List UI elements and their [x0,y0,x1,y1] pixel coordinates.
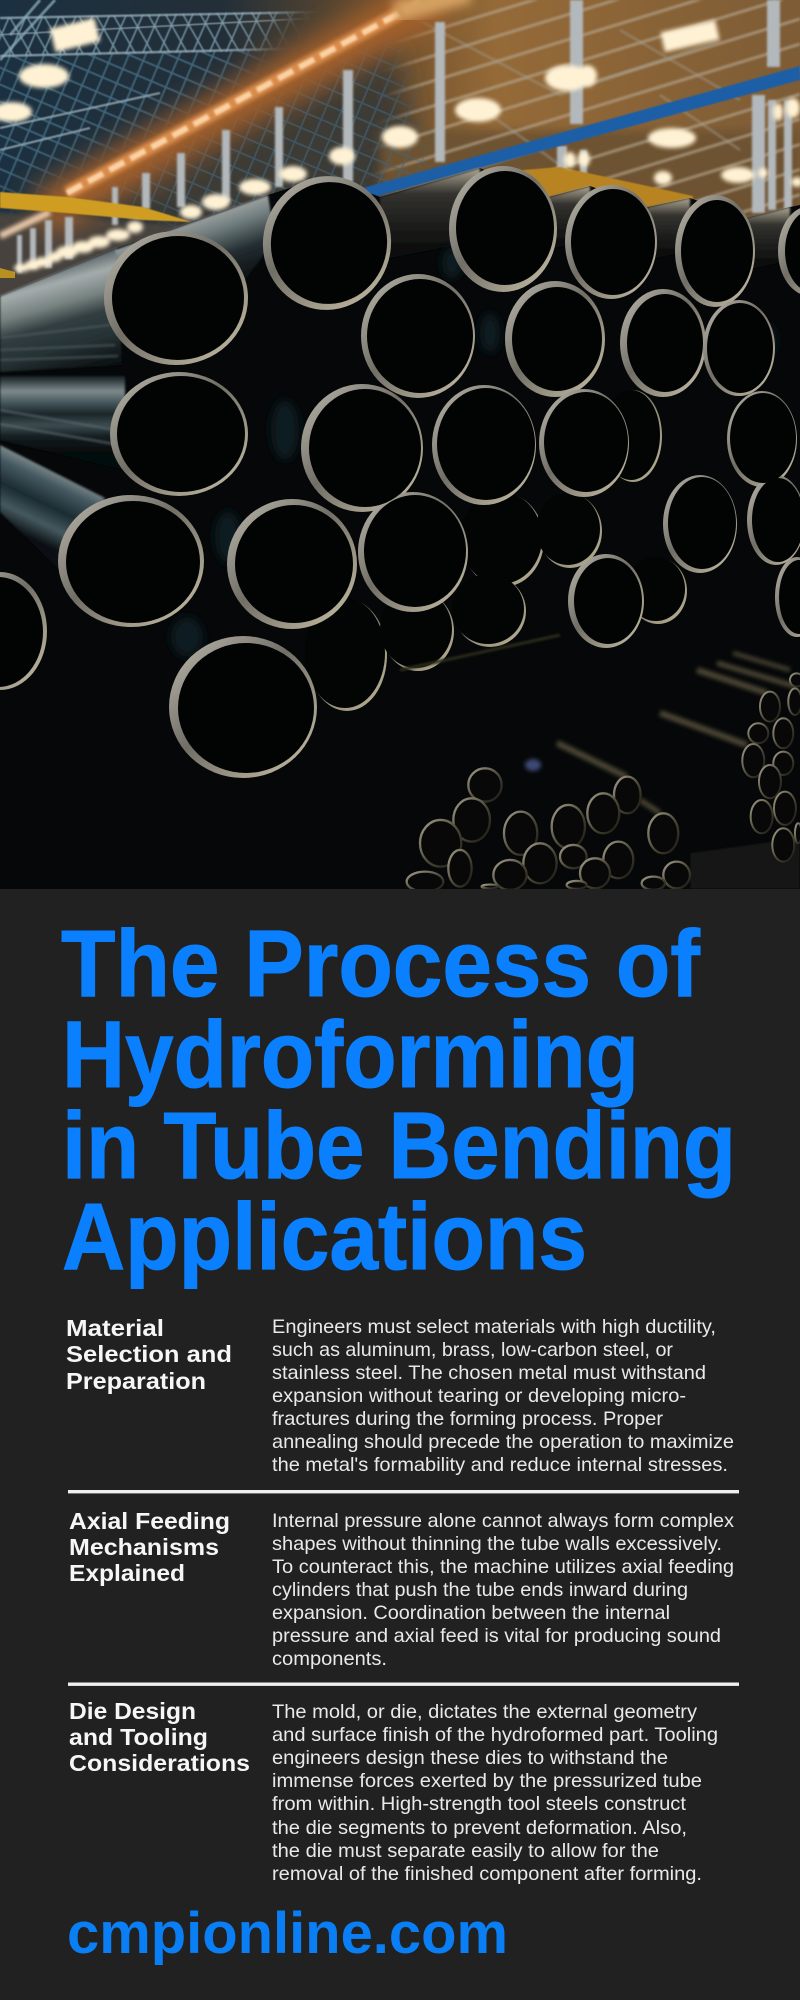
section 3 body text: the die must separate easily to allow for the [272,1840,659,1862]
lower middle ceiling tone [119,46,428,225]
section 2 body text [272,1510,734,1670]
section 2 body text: cylinders that push the tube ends inward during [272,1579,688,1601]
section 2 body text: shapes without thinning the tube walls excessively. [272,1533,722,1555]
section 2 heading: Axial Feeding Mechanisms Explained: Explained [69,1560,185,1586]
section 3 heading: Die Design and Tooling Considerations: and Tooling [69,1724,208,1750]
small tubes cluster, right side [742,673,800,862]
section 3 heading: Die Design and Tooling Considerations: Die Design [69,1698,196,1724]
section 3 body text: engineers design these dies to withstand the [272,1747,668,1769]
section 3 body text: The mold, or die, dictates the external geometry [272,1701,697,1723]
blue roof beam [363,66,800,200]
tube walls receding to the left [0,168,790,570]
section 1 body text: fractures during the forming process. Proper [272,1408,664,1430]
section 3 body text: removal of the finished component after forming. [272,1863,702,1885]
footer website: cmpionline.com [67,1901,508,1966]
title: The Process of [61,911,700,1017]
dark mass of the tube stack [0,168,800,301]
foreground floor and long small tubes [400,635,800,889]
section 1 body text: Engineers must select materials with high ductility, [272,1316,716,1338]
steel columns [17,0,792,273]
section 2 heading: Axial Feeding Mechanisms Explained: Mechanisms [69,1534,219,1560]
title: Applications [62,1184,587,1290]
section 3 body text: immense forces exerted by the pressurized tube [272,1770,702,1792]
section 1 body text: the metal's formability and reduce internal stresses. [272,1454,728,1476]
section 1 body text [272,1316,734,1476]
section 3 body text: and surface finish of the hydroformed part. Tooling [272,1724,718,1746]
section 1 heading: Material Selection and Preparation [66,1315,232,1394]
photo: stacked steel tubes in a warehouse [0,0,800,892]
orange glowing ceiling band [40,0,440,215]
section 2 body text: pressure and axial feed is vital for producing sound [272,1625,721,1647]
section 3 body text: from within. High-strength tool steels construct [272,1793,687,1815]
ceiling lights [0,18,800,272]
section 2 body text: To counteract this, the machine utilizes axial feeding [272,1556,734,1578]
faint wall reflections [171,247,776,657]
section 1 body text: such as aluminum, brass, low-carbon steel, or [272,1339,674,1361]
section 2 heading: Axial Feeding Mechanisms Explained [69,1508,230,1586]
section 1 heading: Material Selection and Preparation: Material [66,1315,164,1341]
section 2 body text: expansion. Coordination between the internal [272,1602,670,1624]
front row tubes: openings [0,171,800,773]
back row tubes [307,390,687,711]
section 1 body text: stainless steel. The chosen metal must withstand [272,1362,706,1384]
small tubes cluster, foreground [407,673,800,892]
front row tubes: rims [0,166,800,778]
title: Hydroforming [62,1002,639,1108]
section 1 heading: Material Selection and Preparation: Selection and [66,1341,232,1367]
yellow crane beam [0,192,192,222]
right ceiling purlins [376,0,800,214]
section 1 body text: expansion without tearing or developing micro- [272,1385,686,1407]
section 2 body text: components. [272,1648,387,1670]
section 2 body text: Internal pressure alone cannot always form complex [272,1510,734,1532]
title: in Tube Bending [62,1093,736,1199]
section 1 body text: annealing should precede the operation to maximize [272,1431,734,1453]
warehouse ceiling [0,0,800,300]
section 3 body text [272,1701,718,1885]
section 3 heading: Die Design and Tooling Considerations: Considerations [69,1750,250,1776]
section 1 heading: Material Selection and Preparation: Preparation [66,1368,206,1394]
left roof truss lattice [0,0,311,212]
section 3 heading: Die Design and Tooling Considerations [69,1698,250,1776]
section 3 body text: the die segments to prevent deformation. Also, [272,1817,687,1839]
middle truss lattice [119,44,434,228]
title [61,911,736,1290]
section 2 heading: Axial Feeding Mechanisms Explained: Axial Feeding [69,1508,230,1534]
